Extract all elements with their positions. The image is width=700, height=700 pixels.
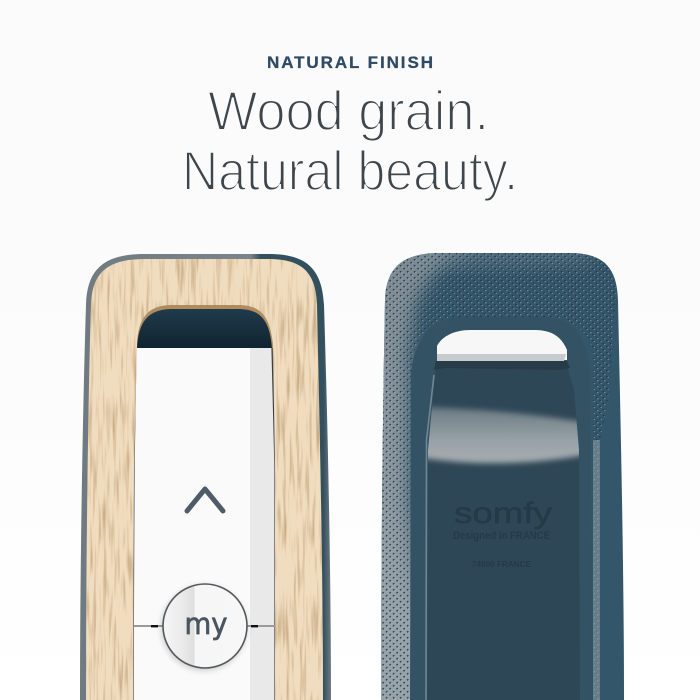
my button: my	[184, 607, 228, 641]
embossed logo: 74800 FRANCE	[472, 559, 531, 569]
hole edge line	[133, 348, 275, 700]
embossed logo: somfy	[454, 497, 552, 530]
remote front with wood frame	[80, 254, 331, 700]
dotted texture	[381, 253, 616, 700]
divider lines beside my button	[134, 625, 275, 627]
window ledge	[437, 354, 566, 361]
white key panel	[133, 348, 275, 700]
wood frame	[86, 259, 323, 700]
title: Natural beauty.	[182, 139, 518, 202]
dark outer shell	[80, 254, 331, 700]
title	[182, 79, 518, 202]
shell	[381, 253, 624, 700]
icon: up chevron	[187, 489, 223, 511]
grey sheen on shell	[381, 253, 595, 700]
eyebrow heading: NATURAL FINISH	[267, 53, 433, 72]
ledge shadow	[434, 361, 570, 370]
remote back with dotted shell	[381, 253, 624, 700]
embossed logo	[453, 497, 552, 569]
hole window	[437, 330, 567, 360]
embossed logo: Designed in FRANCE	[453, 530, 550, 542]
finger hole rim	[410, 317, 593, 700]
dark recess	[137, 309, 272, 349]
inner panel	[427, 362, 580, 700]
reflection on panel	[410, 407, 596, 463]
panel side shading	[250, 348, 275, 700]
rim highlight	[426, 375, 434, 700]
right dotted stripe	[593, 440, 600, 700]
hole lip	[133, 305, 275, 700]
my button	[161, 584, 247, 671]
title: Wood grain.	[208, 79, 489, 142]
